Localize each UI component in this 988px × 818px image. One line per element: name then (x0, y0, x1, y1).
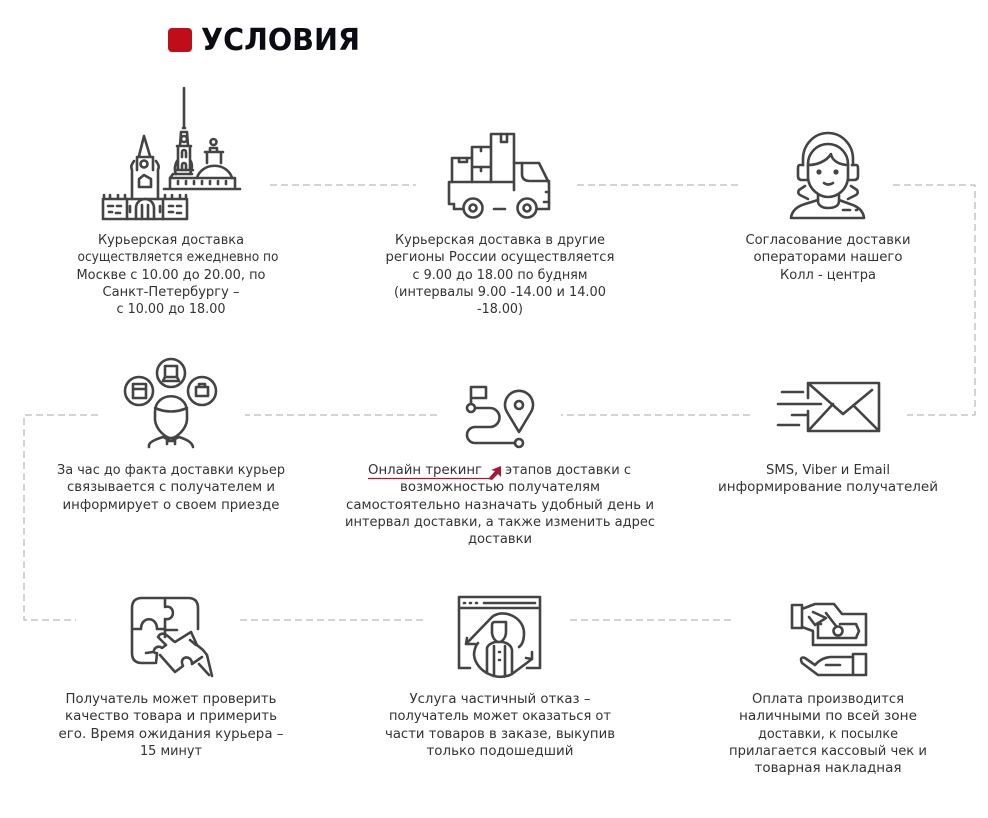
text: check goods: его. Время ожидания курьера – (58, 727, 284, 742)
text: call centre coordination: Согласование доставки (746, 233, 910, 248)
text: courier delivery regions: -18.00) (477, 302, 523, 317)
icon: route with flag and pin (467, 387, 533, 447)
text: courier calls one hour before: За час до факта доставки курьер (57, 463, 285, 478)
text: payment: прилагается кассовый чек и (729, 744, 927, 759)
icon: browser window with person and arrows (459, 597, 540, 677)
text: payment: наличными по всей зоне (739, 709, 917, 724)
icon: call centre operator (791, 133, 864, 218)
text: check goods: 15 минут (140, 744, 202, 759)
text: check goods: качество товара и примерить (65, 709, 277, 724)
icon: Moscow and Saint Petersburg landmarks (103, 88, 240, 219)
text: online tracking: этапов доставки с (505, 463, 631, 478)
text: call centre coordination: операторами нашего (754, 250, 903, 265)
text: courier delivery Moscow: с 10.00 до 18.00 (116, 302, 226, 317)
text: online tracking: интервал доставки, а также изменить адрес (345, 515, 655, 530)
text: SMS Viber Email: информирование получателей (718, 480, 938, 495)
text: courier calls one hour before: информирует о своем приезде (62, 498, 280, 513)
text: payment: Оплата производится (752, 692, 904, 707)
text: online tracking: Онлайн трекинг (368, 463, 482, 478)
text: online tracking (345, 463, 655, 547)
text: call centre coordination: Колл - центра (780, 268, 876, 283)
text: courier delivery regions (386, 233, 614, 317)
text: payment: доставки, к посылке (758, 727, 898, 742)
text: online tracking: доставки (468, 532, 532, 547)
text: courier calls one hour before (57, 463, 285, 513)
text: online tracking: самостоятельно назначать удобный день и (346, 498, 654, 513)
icon: red arrow with underline (368, 466, 501, 480)
icon: hands with banknote (792, 604, 866, 675)
heading text: УСЛОВИЯ (201, 23, 360, 58)
text: partial refusal: части товаров в заказе, выкупив (385, 727, 615, 742)
text: courier delivery Moscow: Москве с 10.00 до 20.00, по (76, 268, 266, 283)
text: online tracking: возможностью получателям (400, 480, 600, 495)
text: check goods (58, 692, 284, 759)
text: courier delivery regions: Курьерская доставка в другие (395, 233, 605, 248)
icon: puzzle and hand (132, 598, 212, 676)
text: courier delivery Moscow: осуществляется ежедневно по (78, 250, 279, 265)
text: courier delivery regions: с 9.00 до 18.00 по будням (412, 268, 588, 283)
text: SMS Viber Email: SMS, Viber и Email (766, 463, 890, 478)
text: partial refusal: получатель может оказаться от (389, 709, 611, 724)
text: courier calls one hour before: связывается с получателем и (67, 480, 275, 495)
text: courier delivery Moscow (76, 233, 279, 317)
text: payment (729, 692, 927, 776)
text: partial refusal: только подошедший (426, 744, 574, 759)
icon: truck with boxes (449, 134, 549, 218)
icon: envelope with speed lines (778, 383, 879, 431)
icon: red square (168, 28, 192, 52)
text: courier delivery Moscow: Санкт-Петербургу – (102, 285, 240, 300)
icon: courier with three circles (125, 359, 216, 447)
text: partial refusal (385, 692, 615, 759)
text: courier delivery regions: регионы России осуществляется (386, 250, 614, 265)
title (168, 23, 360, 58)
text: courier delivery regions: (интервалы 9.00 -14.00 и 14.00 (394, 285, 606, 300)
text: courier delivery Moscow: Курьерская доставка (98, 233, 244, 248)
text: check goods: Получатель может проверить (66, 692, 276, 707)
text: partial refusal: Услуга частичный отказ – (410, 692, 590, 707)
text: SMS Viber Email (718, 463, 938, 495)
text: call centre coordination (746, 233, 910, 283)
text: payment: товарная накладная (754, 761, 902, 776)
